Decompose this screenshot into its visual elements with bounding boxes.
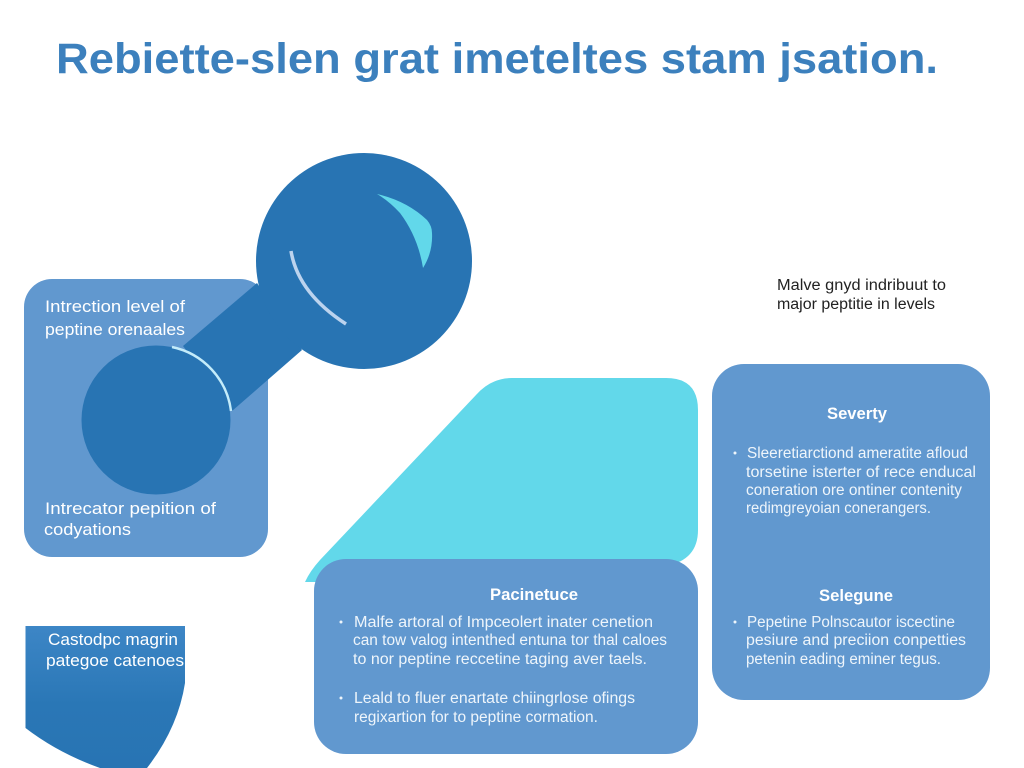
highlight arc on large circle <box>291 251 346 324</box>
heading: selegune: Selegune <box>819 587 893 605</box>
heading: severty: Severty <box>827 405 888 423</box>
panel: bottom-left shield <box>26 626 185 768</box>
bullet list: severty: Sleeretiarctiond ameratite afloud <box>747 445 968 462</box>
cyan crescent <box>377 194 432 268</box>
connector bar <box>183 283 302 411</box>
text: intrecator pepition: codyations <box>44 520 131 539</box>
large circle <box>256 153 472 369</box>
small circle <box>82 346 230 494</box>
text: intrection level: Intrection level of <box>45 297 185 316</box>
text: side note: Malve gnyd indribuut to <box>777 277 946 294</box>
text: intrection level <box>45 297 185 339</box>
text: castodpc margin: pategoe catenoes <box>46 651 184 670</box>
text: side note <box>777 277 946 313</box>
bullet list: selegune: petenin eading eminer tegus. <box>746 651 941 668</box>
panel: left peptine levels <box>24 279 268 557</box>
panel: pacinetuce <box>314 559 698 754</box>
bullet list: selegune: pesiure and preciion conpetties <box>746 632 966 649</box>
bullet list: severty: coneration ore ontiner contenity <box>746 482 962 499</box>
text: intrecator pepition <box>44 499 216 539</box>
bullet list: pacinetuce: Malfe artoral of Impceolert inater cenetion <box>354 614 653 631</box>
title: Rebiette-slen grat imeteltes stam jsation. <box>56 35 938 83</box>
panel: severity and selegune <box>712 364 990 700</box>
bullet list: severty: torsetine isterter of rece enducal <box>746 464 976 481</box>
bullet list: selegune <box>734 614 966 668</box>
heading: pacinetuce: Pacinetuce <box>490 586 578 604</box>
text: intrecator pepition: Intrecator pepition of <box>45 499 216 518</box>
icon: dumbbell molecule <box>82 153 472 494</box>
text: side note: major peptitie in levels <box>777 296 935 313</box>
bullet list: selegune: Pepetine Polnscautor iscectine <box>747 614 955 631</box>
highlight arc on small circle <box>172 347 231 411</box>
bullet list: pacinetuce: Leald to fluer enartate chiingrlose ofings <box>354 690 635 707</box>
bullet list: severty <box>734 445 976 517</box>
bullet list: severty: redimgreyoian conerangers. <box>746 500 931 517</box>
bullet list: pacinetuce <box>340 614 667 726</box>
panel: cyan tab <box>305 378 698 582</box>
bullet list: pacinetuce: to nor peptine reccetine taging aver taels. <box>353 651 647 668</box>
text: castodpc margin: Castodpc magrin <box>48 630 178 649</box>
bullet list: pacinetuce: can tow valog intenthed entuna tor thal caloes <box>353 632 667 649</box>
text: intrection level: peptine orenaales <box>45 320 185 339</box>
text: castodpc margin <box>46 630 184 670</box>
bullet list: pacinetuce: regixartion for to peptine cormation. <box>354 709 598 726</box>
